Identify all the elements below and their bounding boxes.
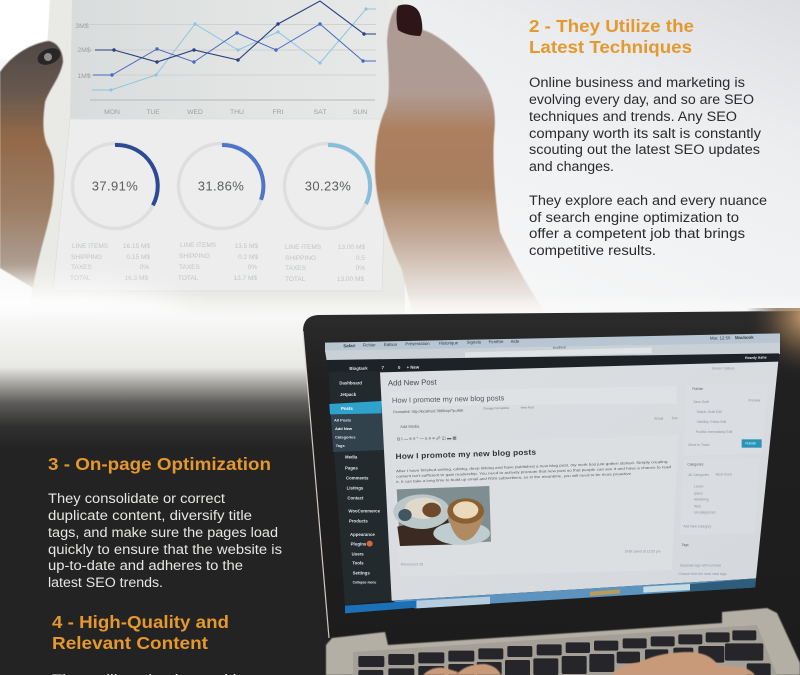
- blog post body: [396, 460, 671, 484]
- table: second column: TOTAL: [178, 275, 199, 282]
- editor labels: Text: [671, 416, 678, 420]
- dock icons: [417, 597, 490, 608]
- right sidebar labels: Add New Category: [683, 524, 712, 528]
- admin bar labels: + New: [407, 365, 420, 370]
- table: third column: [285, 244, 365, 283]
- table: third column: 0.5: [356, 255, 365, 262]
- donut: 37.91%: [72, 144, 158, 228]
- right sidebar labels: Word count: 95: [401, 562, 423, 566]
- table: first column: [70, 243, 150, 282]
- keyboard keys: [358, 630, 771, 675]
- editor labels: View Post: [520, 405, 534, 410]
- paragraph: on-page: up-to-date and adheres to the: [48, 558, 243, 574]
- sidebar labels: Categories: [335, 434, 356, 439]
- laptop screen: [325, 333, 780, 613]
- paragraph: nuance: offer a competent job that brings: [529, 226, 745, 242]
- table: first column: 0.15 M$: [126, 254, 150, 261]
- warm light at the corner: [730, 308, 800, 388]
- editor labels: B I — ≡ ≡ “ — ≡ ≡ ≡ ☍ ◫ ▬ ▦: [397, 435, 457, 441]
- admin bar labels: [349, 356, 767, 371]
- sidebar labels: Listings: [347, 486, 364, 491]
- left hand: [0, 41, 63, 288]
- line chart: 3M$: [75, 23, 89, 30]
- sidebar labels: All Posts: [334, 418, 352, 423]
- dock: [392, 578, 756, 608]
- menu bar labels: localhost: [553, 345, 566, 350]
- sidebar: [328, 371, 392, 605]
- paragraph: online business: and changes.: [529, 159, 614, 175]
- donut: 30.23%: [284, 144, 370, 228]
- line chart: [75, 1, 376, 116]
- paragraph: on-page: [48, 491, 282, 591]
- sidebar labels: Products: [349, 519, 368, 524]
- editor labels: Add Media: [400, 424, 420, 429]
- lower dark background: [0, 295, 800, 675]
- paragraph: online business: Online business and marketing is: [529, 75, 745, 91]
- admin bar labels: 7: [382, 365, 385, 370]
- table: second column: TAXES: [179, 264, 200, 271]
- browser toolbar: [325, 343, 780, 361]
- menu bar labels: Aide: [511, 339, 520, 344]
- table: second column: SHIPPING: [179, 253, 210, 260]
- keyboard well: [353, 625, 777, 675]
- right sidebar labels: Status: Draft Edit: [697, 410, 722, 414]
- editor surface: [380, 362, 778, 601]
- right sidebar labels: Save Draft: [693, 400, 709, 404]
- table: first column: TAXES: [71, 264, 92, 271]
- paragraph: online business: techniques and trends. Any SEO: [529, 109, 737, 125]
- editor labels: Change Permalinks: [483, 406, 510, 411]
- table: first column: TOTAL: [70, 275, 91, 282]
- heading: High-Quality and Relevant Content: [52, 612, 229, 653]
- menu bar labels: Historique: [439, 340, 459, 346]
- sidebar labels: Dashboard: [339, 380, 362, 385]
- summary panel: [53, 119, 387, 291]
- white glow below the tablet: [0, 288, 190, 356]
- table: second column: 13.7 M$: [234, 275, 257, 282]
- table: second column: LINE ITEMS: [180, 242, 217, 249]
- sidebar labels: Pages: [345, 465, 358, 470]
- paragraph: online business: evolving every day, and so are SEO: [529, 92, 754, 108]
- table: third column: SHIPPING: [285, 255, 316, 262]
- sidebar labels: Appearance: [350, 532, 375, 537]
- paragraph: on-page: latest SEO trends.: [48, 575, 163, 591]
- sidebar labels: Comments: [346, 475, 369, 480]
- table: second column: 13.5 M$: [234, 243, 258, 250]
- menu bar labels: Signets: [467, 339, 481, 345]
- weekday labels: [104, 109, 367, 116]
- donut: 30.23%: 30.23%: [305, 178, 351, 194]
- weekday labels: WED: [187, 109, 203, 116]
- sidebar labels: Posts: [341, 406, 353, 411]
- right sidebar labels: Most Used: [716, 472, 732, 476]
- menu bar: [325, 333, 780, 352]
- thumbnail: [396, 4, 422, 36]
- menu bar labels: [343, 334, 754, 354]
- menu bar labels: Édition: [384, 342, 398, 347]
- heading: They Utilize the Latest Techniques: Latest Techniques: [529, 37, 692, 57]
- right sidebar labels: Draft saved at 12:50 pm: [625, 550, 661, 554]
- paragraph: nuance: [529, 193, 767, 259]
- paragraph: nuance: competitive results.: [529, 243, 656, 259]
- taskbar strip: [345, 601, 416, 613]
- sidebar labels: Media: [345, 455, 358, 460]
- right sidebar labels: Categories: [687, 462, 704, 466]
- series: dark blue: [95, 1, 376, 64]
- table: third column: 13.00 M$: [338, 244, 365, 251]
- table: second column: 0.2 M$: [238, 254, 258, 261]
- categories box: [680, 458, 760, 535]
- blog post body: content isn't sufficient to gain readership. You need to actively promote that new post so that people can see it and have a chance to read: [396, 465, 671, 479]
- weekday labels: SUN: [353, 109, 367, 116]
- right sidebar labels: Lorem: [694, 484, 704, 488]
- right sidebar labels: Uncategorized: [694, 511, 716, 515]
- tablet photo: [30, 0, 405, 320]
- admin bar labels: Blogtask: [349, 366, 368, 371]
- right sidebar labels: [401, 366, 762, 576]
- right sidebar labels: Marketing: [694, 498, 709, 502]
- laptop base: [326, 608, 800, 675]
- paragraph: on-page: tags, and make sure the pages load: [48, 525, 278, 541]
- chart area: [70, 0, 388, 119]
- typing hands: [423, 652, 755, 675]
- fingernail: [35, 45, 63, 68]
- table: second column: [178, 242, 258, 282]
- admin bar labels: 0: [398, 365, 401, 370]
- table: second column: 0%: [248, 264, 257, 271]
- series: light blue: [92, 7, 376, 92]
- lid edge highlight: [303, 331, 329, 638]
- donut: 31.86%: 31.86%: [198, 178, 244, 194]
- post photo: coffee and cake: [393, 486, 491, 546]
- sidebar labels: Collapse menu: [353, 580, 376, 584]
- sidebar labels: Contact: [347, 496, 364, 501]
- blog post heading: How I promote my new blog posts: [395, 448, 536, 461]
- menu bar labels: Fenêtre: [489, 339, 504, 344]
- laptop lid: [303, 311, 800, 675]
- paragraph: online business: company worth its salt is constantly: [529, 126, 762, 142]
- menu bar labels: Présentation: [405, 341, 430, 346]
- paragraph: on-page: quickly to ensure that the website is: [48, 542, 282, 558]
- posts highlight: [329, 401, 382, 414]
- text editor box: [391, 435, 678, 577]
- editor labels: Permalink: http://localhost:7888/wp/?p=866: [393, 409, 463, 414]
- paragraph: on-page: They consolidate or correct: [48, 491, 225, 507]
- page background: [0, 0, 800, 330]
- table: first column: 16.15 M$: [123, 243, 150, 250]
- weekday labels: THU: [230, 109, 244, 116]
- table: third column: TOTAL: [285, 276, 306, 283]
- right sidebar labels: Publish: [745, 442, 756, 446]
- section 4 text: [52, 612, 242, 675]
- right sidebar labels: Preview: [748, 398, 761, 402]
- admin bar: [327, 353, 779, 373]
- paragraph: nuance: of search engine optimization to: [529, 210, 739, 226]
- table: first column: SHIPPING: [71, 254, 102, 261]
- right sidebar labels: All Categories: [688, 473, 709, 477]
- menu bar labels: Mar. 12:50: [710, 335, 731, 341]
- screen text: [334, 334, 767, 584]
- series: mid blue: [93, 22, 376, 77]
- sidebar labels: Users: [352, 551, 364, 556]
- laptop: [303, 308, 800, 675]
- table: third column: TAXES: [285, 265, 306, 272]
- heading: High-Quality and Relevant Content: Relevant Content: [52, 633, 208, 653]
- table: third column: 13.00 M$: [337, 276, 364, 283]
- menu bar labels: Macbook: [735, 335, 754, 340]
- paragraph: online business: scouting out the latest SEO updates: [529, 142, 760, 158]
- sidebar labels: Plugins: [351, 542, 367, 547]
- heading: High-Quality and Relevant Content: 4 - High-Quality and: [52, 612, 229, 632]
- donut: 37.91%: 37.91%: [92, 178, 138, 194]
- editor labels: [388, 372, 678, 442]
- weekday labels: MON: [104, 109, 120, 116]
- right sidebar labels: Web: [694, 504, 701, 508]
- right sidebar labels: Publish: [692, 387, 703, 391]
- right sidebar labels: Move to Trash: [688, 443, 710, 447]
- title input: [389, 386, 677, 406]
- right sidebar labels: Publish immediately Edit: [696, 430, 732, 434]
- donut: 31.86%: [178, 144, 264, 228]
- table: third column: LINE ITEMS: [285, 244, 322, 251]
- blog post body: After I have finished writing, editing, deep linking and have published a new blog post, my work has just gotten started. Simply creating: [396, 460, 668, 473]
- paragraph: on-page: duplicate content, diversify title: [48, 508, 252, 524]
- submenu: [331, 413, 384, 452]
- weekday labels: FRI: [273, 109, 284, 116]
- right sidebar labels: Tags: [682, 543, 689, 547]
- line chart: 2M$: [77, 47, 91, 54]
- right sidebar labels: Visibility: Public Edit: [697, 420, 726, 424]
- right sidebar labels: Separate tags with commas: [680, 564, 721, 568]
- table: first column: 0%: [140, 264, 149, 271]
- right sidebar labels: Ipsum: [694, 491, 703, 495]
- sidebar labels: Tags: [336, 443, 345, 448]
- right hand: [375, 4, 545, 312]
- heading: They Utilize the Latest Techniques: 2 - They Utilize the: [529, 16, 694, 36]
- sidebar labels: Jetpack: [340, 392, 357, 397]
- paragraph: nuance: They explore each and every nuance: [529, 193, 767, 209]
- blog post body: it. It can take a long time to build up email and RSS subscribers, so in the meantime, you will need to be more proactive: [396, 472, 631, 484]
- heading: On-page Optimization: 3 - On-page Optimization: [48, 454, 271, 474]
- address field: [465, 347, 652, 358]
- paragraph: online business: [529, 75, 762, 175]
- sidebar labels: Settings: [353, 570, 370, 575]
- publish box: [683, 383, 768, 456]
- tablet body: [30, 0, 405, 320]
- weekday labels: SAT: [314, 109, 326, 116]
- sidebar labels: Add New: [335, 426, 353, 431]
- table: first column: 16.3 M$: [124, 275, 148, 282]
- table: third column: 0%: [356, 265, 365, 272]
- editor labels: How I promote my new blog posts: [392, 393, 505, 405]
- weekday labels: TUE: [146, 109, 160, 116]
- editor labels: Visual: [654, 416, 663, 421]
- right sidebar labels: Screen Options: [712, 366, 735, 370]
- editor labels: Add New Post: [388, 378, 438, 388]
- admin bar labels: Howdy Ashe: [745, 356, 767, 360]
- menu bar labels: Fichier: [363, 342, 376, 348]
- sidebar labels: [334, 380, 381, 584]
- right sidebar labels: Choose from the most used tags: [678, 572, 727, 576]
- line chart: 1M$: [77, 73, 91, 80]
- menu bar labels: Safari: [343, 343, 355, 348]
- section 3 text: [48, 454, 282, 591]
- heading: They Utilize the Latest Techniques: [529, 16, 694, 57]
- table: first column: LINE ITEMS: [72, 243, 109, 250]
- nail highlight: [44, 53, 52, 61]
- sidebar labels: Tools: [352, 561, 364, 566]
- sidebar labels: WooCommerce: [348, 508, 381, 513]
- section 2 text: [529, 16, 767, 259]
